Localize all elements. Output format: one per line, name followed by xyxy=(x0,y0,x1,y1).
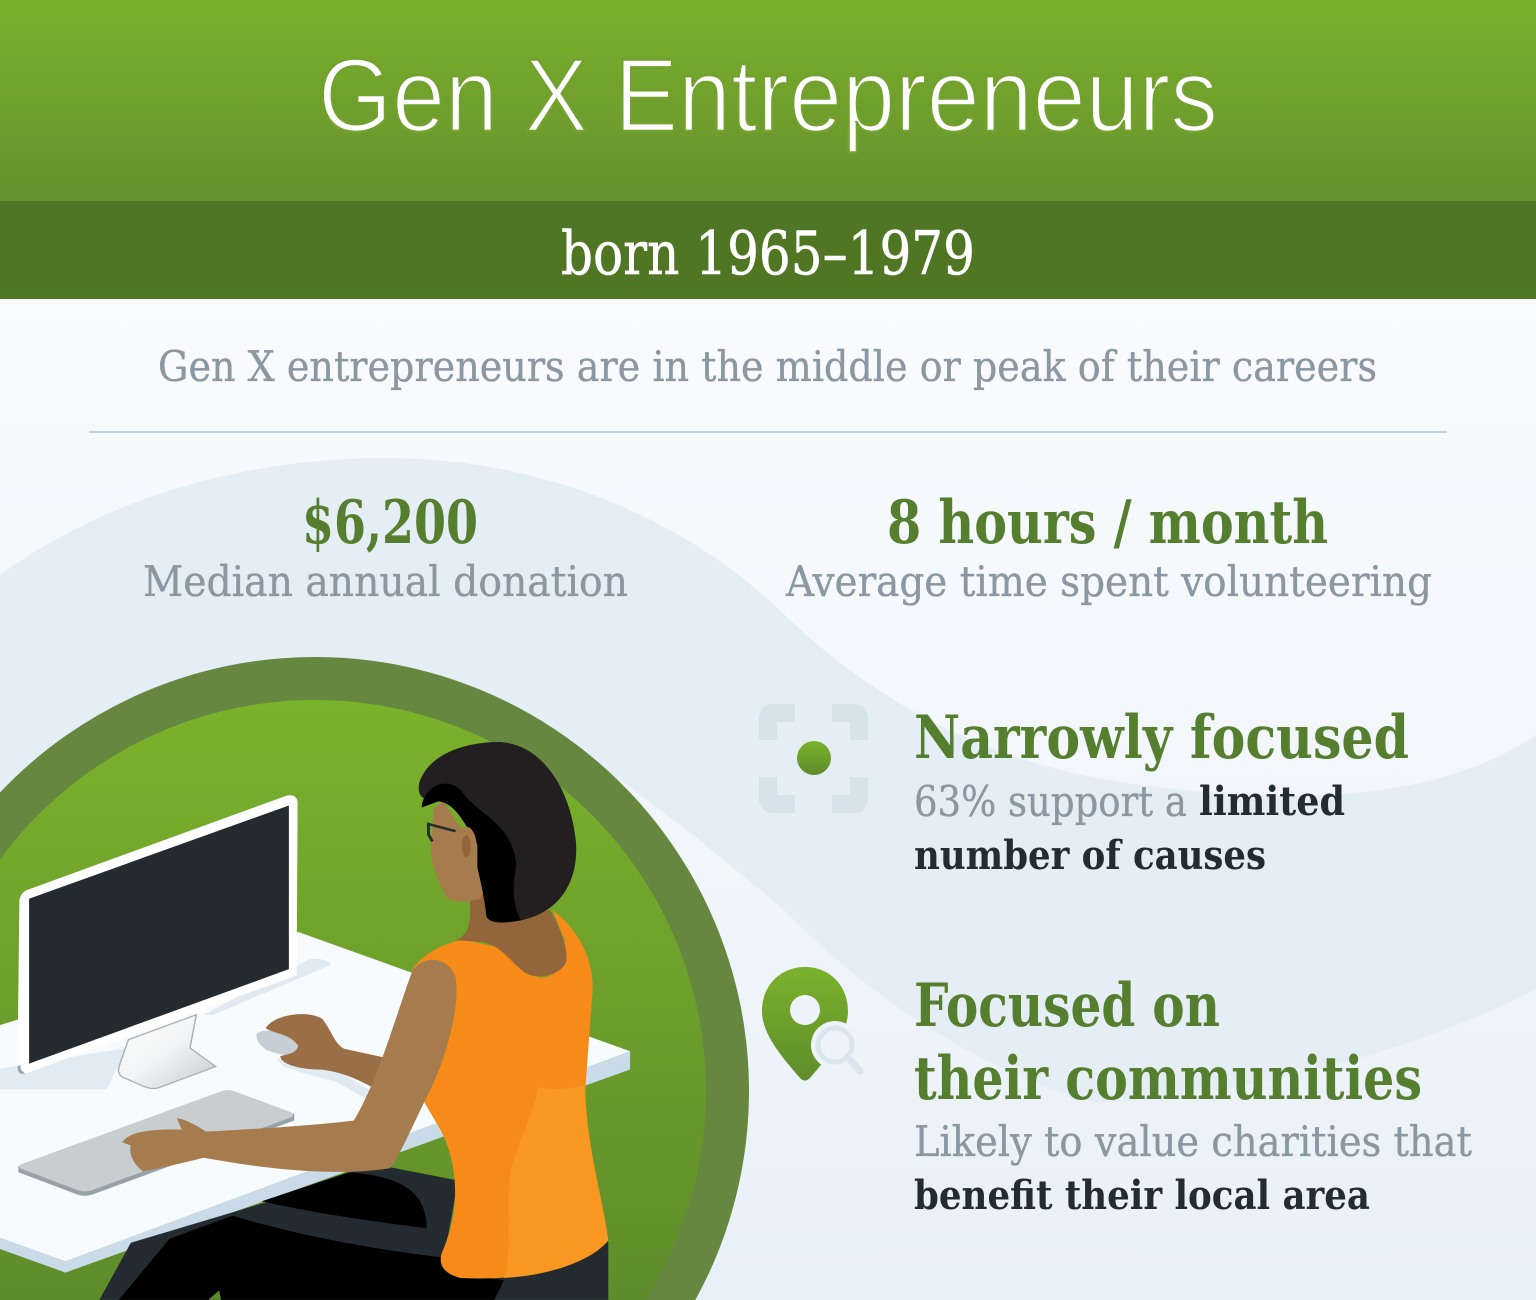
text: focused on communities: Focused on xyxy=(914,971,1220,1041)
stat: volunteering time: Average time spent volunteering xyxy=(785,557,1432,606)
keyboard xyxy=(18,1090,294,1196)
icon: location pin with magnifier xyxy=(762,967,860,1080)
title: Gen X Entrepreneurs xyxy=(318,38,1218,154)
text: narrowly focused xyxy=(914,703,1409,879)
circle ring xyxy=(0,657,749,1300)
text: focused on communities: Likely to value charities that xyxy=(914,1117,1472,1166)
subtitle band xyxy=(0,201,1536,299)
face xyxy=(431,801,485,901)
stat: median donation: $6,200 xyxy=(302,488,478,558)
near arm and hand xyxy=(122,960,457,1172)
subtitle band: born 1965–1979 xyxy=(561,219,975,289)
green circle xyxy=(0,700,706,1300)
stat: volunteering time: 8 hours / month xyxy=(887,488,1328,558)
mouse xyxy=(256,1031,376,1100)
hair xyxy=(419,742,576,923)
background xyxy=(0,299,1536,1300)
illustration: woman at computer xyxy=(0,742,630,1300)
stat: median donation: Median annual donation xyxy=(143,557,628,606)
pants xyxy=(99,1164,608,1300)
monitor stand xyxy=(118,1015,216,1088)
text: narrowly focused: 63% support a xyxy=(914,777,1187,826)
desk xyxy=(0,932,630,1273)
ear xyxy=(456,827,477,870)
glasses xyxy=(428,824,456,841)
top: orange shirt xyxy=(412,910,608,1278)
monitor xyxy=(17,795,298,1074)
far arm and hand xyxy=(266,1014,388,1094)
text: focused on communities: their communities xyxy=(914,1044,1422,1114)
text: focused on communities xyxy=(914,971,1472,1219)
text: narrowly focused: number of causes xyxy=(914,832,1266,879)
stat: median donation xyxy=(143,488,628,606)
neck and back xyxy=(456,895,566,976)
stat: volunteering time xyxy=(785,488,1432,606)
header banner xyxy=(0,0,1536,201)
intro sentence: Gen X entrepreneurs are in the middle or peak of their careers xyxy=(158,342,1377,391)
text: narrowly focused: Narrowly focused xyxy=(914,703,1409,773)
icon: focus target xyxy=(768,713,859,804)
text: focused on communities: benefit their local area xyxy=(914,1172,1370,1219)
text: narrowly focused: limited xyxy=(1199,778,1345,825)
